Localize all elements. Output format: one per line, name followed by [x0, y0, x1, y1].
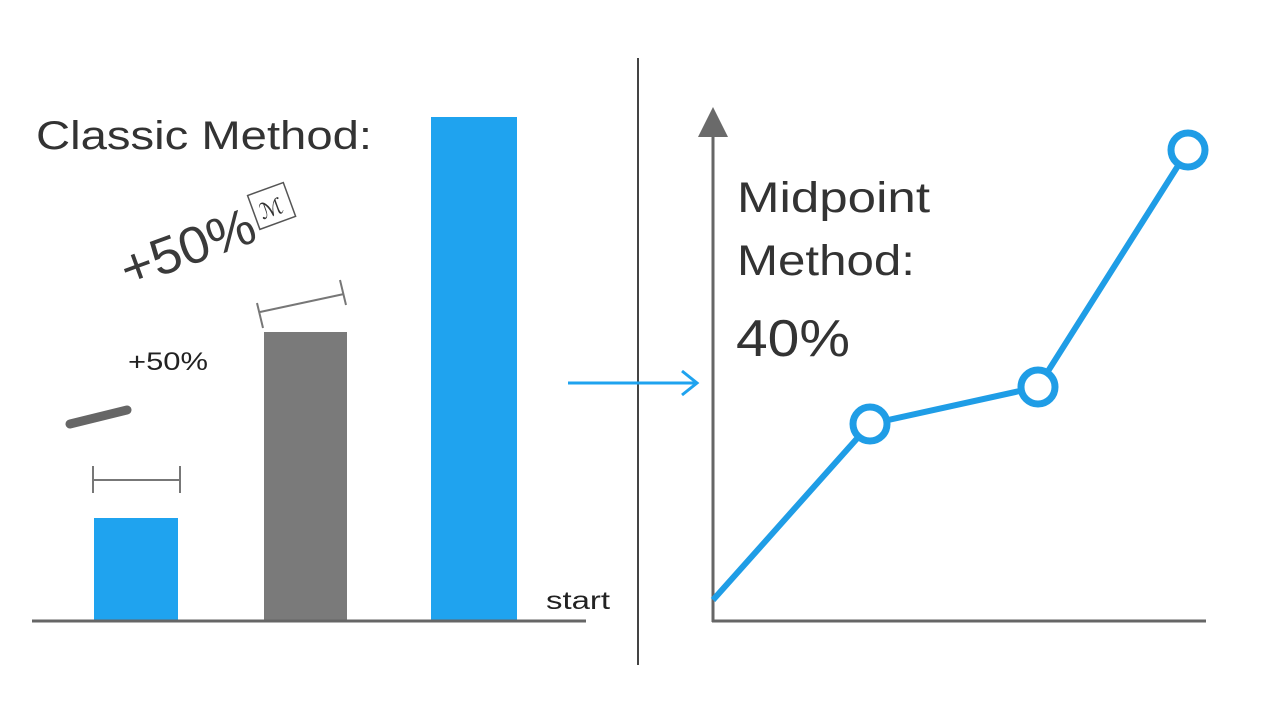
- title: classic method: Classic Method:: [36, 114, 372, 158]
- title: midpoint method: Midpoint: [737, 174, 930, 222]
- rotated label +50%: ℳ: [256, 193, 287, 224]
- panel: midpoint method line chart: [698, 107, 1206, 622]
- line series: [713, 133, 1205, 600]
- bar: gray: [264, 332, 347, 620]
- baseline: [32, 620, 586, 622]
- rotated label +50%: +50%: [112, 197, 264, 299]
- label: start: start: [546, 587, 610, 615]
- title: midpoint method: Method:: [737, 237, 915, 285]
- icon: small dash mark: [70, 410, 127, 424]
- panel: classic method bar chart: [32, 114, 610, 621]
- x axis: [712, 620, 1206, 622]
- bar: small blue: [94, 518, 178, 620]
- small label +50%: +50%: [128, 348, 208, 376]
- arrow: classic to midpoint: [568, 371, 697, 395]
- value: 40%: 40%: [736, 310, 850, 368]
- bar: tall blue: [431, 117, 517, 620]
- title: midpoint method: [737, 174, 930, 285]
- bracket over first bar: [93, 466, 180, 493]
- y axis with arrowhead: [698, 107, 728, 622]
- bracket over second bar: [257, 280, 346, 328]
- rotated label +50%: [112, 183, 303, 299]
